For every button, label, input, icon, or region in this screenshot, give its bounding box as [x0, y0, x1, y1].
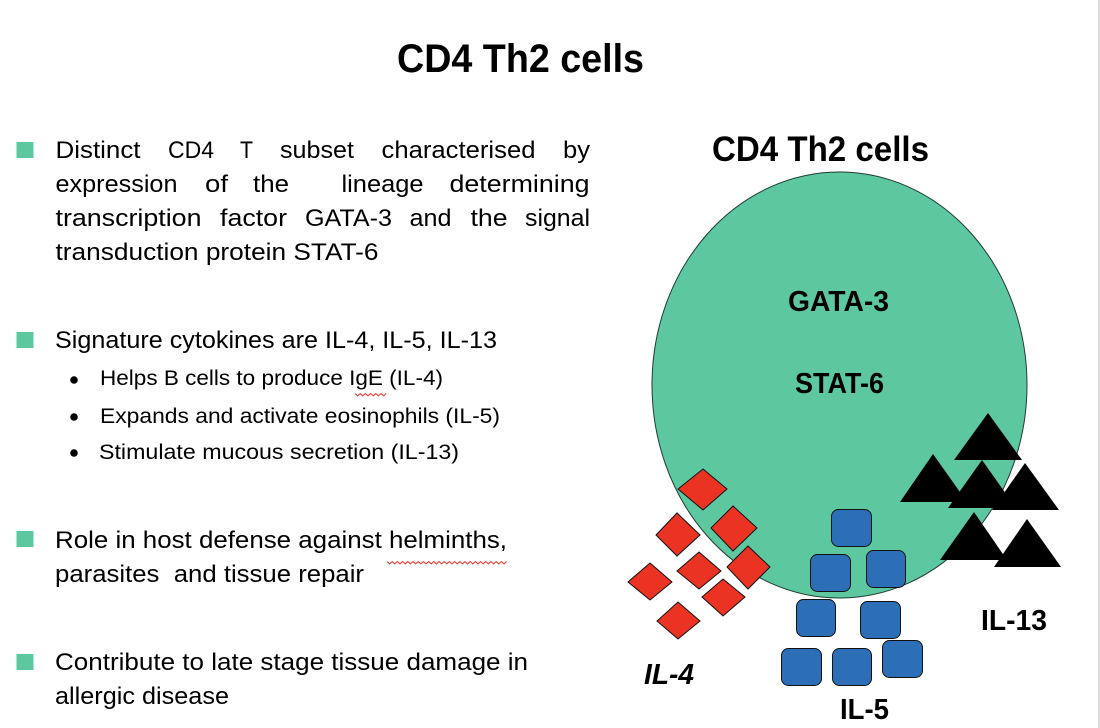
bullet 1: distinct subset: CD4 [168, 137, 214, 164]
bullet 1: distinct subset: determining [450, 171, 590, 198]
bullet 4: tissue damage [16, 649, 528, 710]
title: CD4 Th2 cells [397, 37, 644, 81]
bullet 1: distinct subset: factor [220, 205, 287, 232]
bullet 1: distinct subset: characterised [382, 137, 536, 164]
bullet 1: distinct subset: expression [56, 171, 178, 198]
bullet 1: distinct subset: transduction protein STAT-6 [56, 239, 378, 266]
bullet 3: host defense [16, 527, 507, 588]
bullet 3: host defense: Role in host defense against helminths, [55, 527, 507, 554]
bullet 1: distinct subset: signal [525, 205, 590, 232]
bullet 1: distinct subset: T [240, 137, 253, 164]
bullet 1: distinct subset: and [410, 205, 452, 232]
IL-13 triangles [900, 413, 1061, 567]
bullet 2: signature cytokines: Signature cytokines are IL-4, IL-5, IL-13 [55, 327, 497, 354]
bullet 2: signature cytokines: Expands and activate eosinophils (IL-5) [100, 404, 500, 428]
bullet 1: distinct subset: by [563, 137, 591, 164]
bullet 1: distinct subset: GATA-3 [305, 205, 392, 232]
bullet 1: distinct subset: lineage [342, 171, 424, 198]
bullet 2: signature cytokines [16, 327, 500, 464]
cell body [652, 172, 1027, 598]
label: IL-13: IL-13 [981, 605, 1047, 637]
bullet 1: distinct subset: the [470, 205, 508, 232]
label: GATA-3: GATA-3 [788, 286, 889, 318]
text block: bullet list [16, 137, 591, 710]
bullet 3: host defense: parasites and tissue repair [55, 561, 364, 588]
bullet 2: signature cytokines: Helps B cells to produce IgE (IL-4) [100, 366, 443, 390]
IL-4 diamonds [628, 469, 770, 639]
bullet 1: distinct subset: transcription [56, 205, 202, 232]
label: IL-4: IL-4 [644, 659, 694, 691]
bullet 1: distinct subset: the [253, 171, 289, 198]
bullet 1: distinct subset: subset [280, 137, 354, 164]
bullet 4: tissue damage: allergic disease [55, 683, 229, 710]
bullet 1: distinct subset [16, 137, 591, 266]
IL-5 squares [782, 510, 922, 686]
bullet 4: tissue damage: Contribute to late stage tissue damage in [55, 649, 528, 676]
label: IL-5: IL-5 [840, 694, 889, 726]
diagram: CD4 Th2 cell [628, 129, 1061, 726]
bullet 1: distinct subset: of [205, 171, 228, 198]
bullet 2: signature cytokines: Stimulate mucous secretion (IL-13) [99, 440, 459, 464]
label: STAT-6: STAT-6 [795, 368, 884, 400]
bullet 1: distinct subset: Distinct [56, 137, 141, 164]
diagram heading: CD4 Th2 cells [712, 129, 929, 169]
